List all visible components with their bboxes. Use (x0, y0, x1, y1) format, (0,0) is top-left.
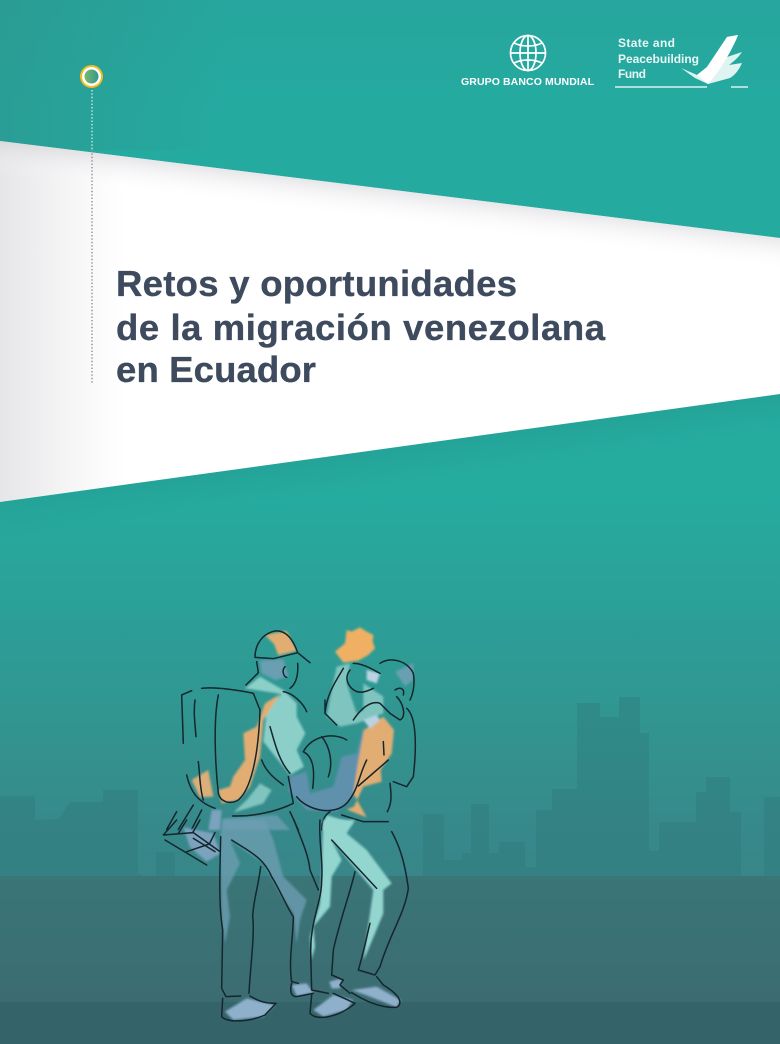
logo: State and Peacebuilding Fund (615, 35, 748, 87)
colour fills: upper (192, 627, 413, 830)
organisation name: GRUPO BANCO MUNDIAL (461, 76, 595, 88)
legs and basket (163, 820, 408, 1021)
white title band (0, 141, 780, 502)
dotted timeline marker (80, 65, 103, 383)
ink outlines: upper (167, 631, 415, 830)
underline rules (615, 86, 748, 88)
fund name (618, 36, 699, 81)
fund name: State and (618, 36, 675, 50)
title (116, 263, 606, 390)
title: de la migración venezolana (116, 307, 606, 348)
icon: bird wing (681, 35, 742, 84)
icon: globe (510, 36, 546, 70)
fund name: Fund (618, 67, 646, 81)
logo: Grupo Banco Mundial (461, 36, 595, 88)
city skyline silhouette (0, 697, 780, 890)
illustration: migrant family (163, 627, 415, 1021)
shadow beneath white band (0, 394, 780, 544)
title: en Ecuador (116, 349, 316, 390)
title: Retos y oportunidades (116, 263, 517, 304)
upper bodies (167, 627, 415, 830)
ink outlines: lower (163, 820, 408, 1021)
ground bands (0, 876, 780, 1044)
colour fills: lower (183, 820, 401, 1020)
fund name: Peacebuilding (618, 52, 699, 66)
